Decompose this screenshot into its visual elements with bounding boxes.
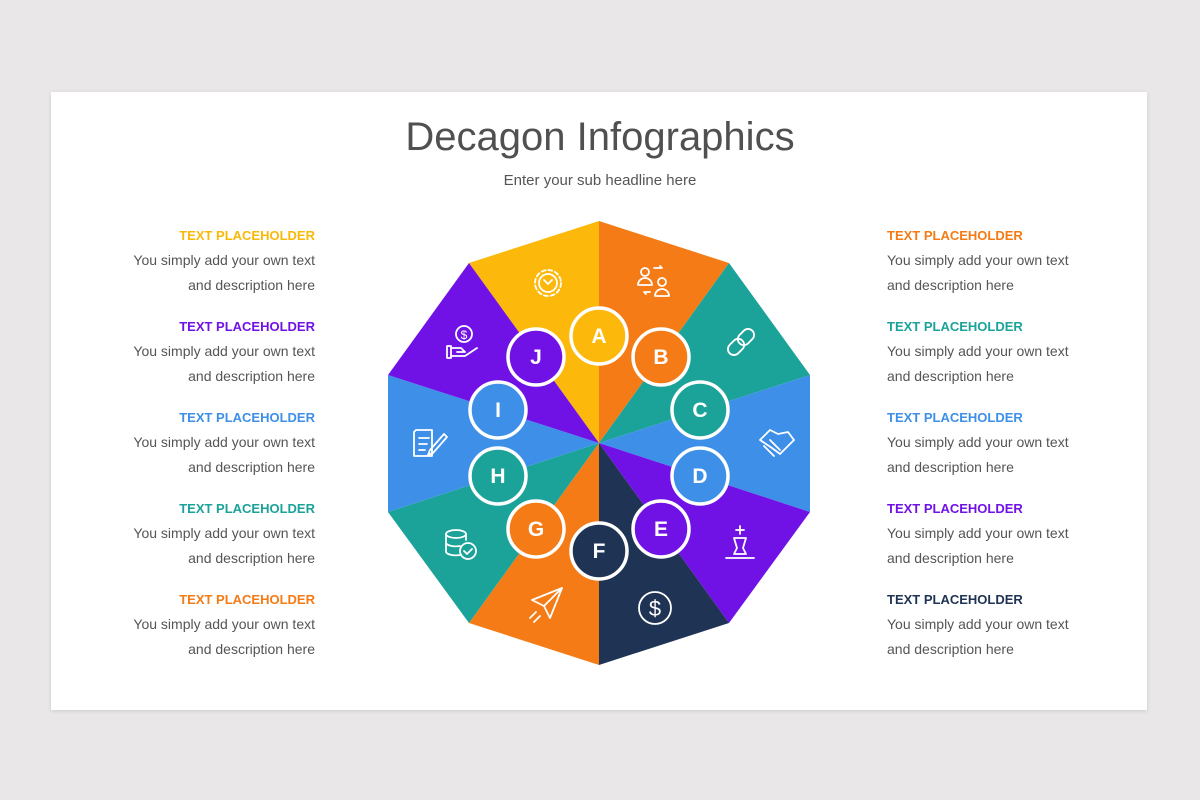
left text 4: and description here [188, 550, 315, 566]
left text 3: You simply add your own text [133, 434, 315, 450]
left text 4 [133, 501, 315, 566]
icon: document pen [414, 430, 447, 456]
left text 3 [133, 410, 315, 475]
card [51, 92, 1147, 710]
left text 1: and description here [188, 277, 315, 293]
icon: dollar coin [639, 592, 671, 624]
left text 5: TEXT PLACEHOLDER [179, 592, 315, 607]
icon: paper plane [530, 588, 562, 622]
right text 3 [887, 410, 1069, 475]
icon: database check [446, 530, 476, 559]
circle H: H [490, 465, 506, 488]
circle I [470, 382, 526, 438]
left text 2: TEXT PLACEHOLDER [179, 319, 315, 334]
icon: gear [535, 270, 561, 296]
circle B: B [653, 346, 669, 369]
circle D [672, 448, 728, 504]
segment F navy [599, 443, 729, 665]
right text 1: You simply add your own text [887, 252, 1069, 268]
right text 4: TEXT PLACEHOLDER [887, 501, 1023, 516]
right text 3: TEXT PLACEHOLDER [887, 410, 1023, 425]
right text 4: You simply add your own text [887, 525, 1069, 541]
right text 2: and description here [887, 368, 1014, 384]
circle B [633, 329, 689, 385]
circle C [672, 382, 728, 438]
icon: handshake [760, 430, 794, 456]
circle H [470, 448, 526, 504]
right text 2: TEXT PLACEHOLDER [887, 319, 1023, 334]
right text 5: You simply add your own text [887, 616, 1069, 632]
circle G [508, 501, 564, 557]
left text 2 [133, 319, 315, 384]
segment E purple [599, 443, 810, 623]
right text 5 [887, 592, 1069, 657]
right text 3: You simply add your own text [887, 434, 1069, 450]
circle D: D [692, 465, 708, 488]
left text 1: TEXT PLACEHOLDER [179, 228, 315, 243]
right text 4 [887, 501, 1069, 566]
icon: chain [725, 326, 757, 358]
left text 5 [133, 592, 315, 657]
subtitle: Enter your sub headline here [504, 172, 696, 189]
circle F [571, 523, 627, 579]
circle G: G [528, 518, 544, 541]
circle E [633, 501, 689, 557]
icon: hand money: $ [461, 328, 468, 342]
title: Decagon Infographics [405, 115, 795, 159]
left text 3: and description here [188, 459, 315, 475]
right text 2 [887, 319, 1069, 384]
segment D blue [599, 375, 810, 512]
left text 3: TEXT PLACEHOLDER [179, 410, 315, 425]
icon: dollar coin: $ [649, 596, 661, 621]
icon: hand money [447, 326, 477, 358]
right text 1: TEXT PLACEHOLDER [887, 228, 1023, 243]
right text 5: and description here [887, 641, 1014, 657]
segment H teal [388, 443, 599, 623]
circle A: A [591, 325, 607, 348]
right text 4: and description here [887, 550, 1014, 566]
circle J [508, 329, 564, 385]
left text 5: and description here [188, 641, 315, 657]
circle A [571, 308, 627, 364]
right text 2: You simply add your own text [887, 343, 1069, 359]
icon: chess king [726, 526, 754, 558]
icon: people swap [638, 266, 669, 296]
segment B orange [599, 221, 729, 443]
right text 5: TEXT PLACEHOLDER [887, 592, 1023, 607]
left text 4: You simply add your own text [133, 525, 315, 541]
circle J: J [530, 346, 542, 369]
circle I: I [495, 399, 501, 422]
segment A yellow [469, 221, 599, 443]
right text 1 [887, 228, 1069, 293]
left text 2: and description here [188, 368, 315, 384]
segment C teal [599, 263, 810, 443]
segment G orange [469, 443, 599, 665]
segment I blue [388, 375, 599, 512]
left text 1 [133, 228, 315, 293]
circle E: E [654, 518, 668, 541]
circle F: F [593, 540, 606, 563]
left text 5: You simply add your own text [133, 616, 315, 632]
segment J purple [388, 263, 599, 443]
left text 1: You simply add your own text [133, 252, 315, 268]
right text 3: and description here [887, 459, 1014, 475]
left text 2: You simply add your own text [133, 343, 315, 359]
circle C: C [692, 399, 708, 422]
left text 4: TEXT PLACEHOLDER [179, 501, 315, 516]
right text 1: and description here [887, 277, 1014, 293]
